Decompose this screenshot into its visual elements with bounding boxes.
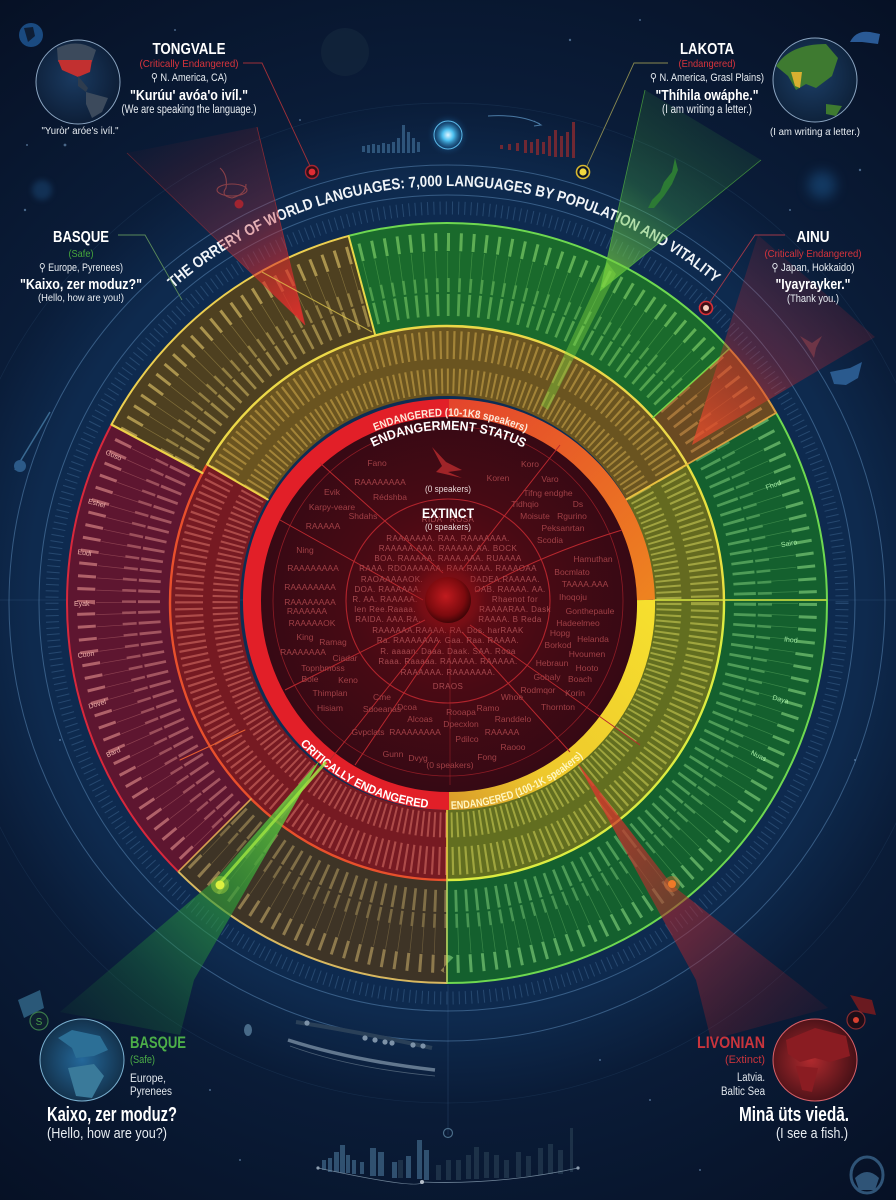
callout: livonian: Latvia. — [737, 1072, 765, 1084]
callout: livonian: (I see a fish.) — [776, 1125, 848, 1142]
callout: basque bottom: Europe, — [130, 1073, 166, 1085]
ring of language labels: RAAAAAAAA — [389, 727, 441, 737]
callout: tongvale — [122, 41, 257, 116]
beam: basque — [60, 760, 326, 1035]
ring of language labels: Fong — [477, 752, 497, 762]
extinct language rows: BOA. RAAAAA. RAAA.AAA. RUAAAA — [374, 554, 522, 563]
central star icon — [426, 113, 470, 157]
marker: ainu — [700, 302, 712, 314]
ring of language labels: Hvoumen — [569, 649, 605, 659]
globe caption: tongvale: "Yuròr' aróe's ivíl." — [42, 126, 119, 137]
callout: livonian: LIVONIAN — [697, 1033, 765, 1052]
callout: tongvale: TONGVALE — [152, 41, 226, 58]
icon: extinct bird — [432, 447, 462, 478]
inner guide circles — [273, 426, 623, 776]
icon: safe badge: S — [36, 1017, 43, 1028]
inner disk — [256, 410, 640, 794]
ring of language labels: Fano — [367, 458, 387, 468]
ring of language labels: Borkod — [545, 640, 572, 650]
callout: basque top: (Safe) — [68, 248, 94, 260]
callout: lakota: LAKOTA — [680, 41, 734, 58]
ring of language labels: Hisiam — [317, 703, 343, 713]
marker: lakota — [576, 166, 590, 178]
label: 0 speakers upper: (0 speakers) — [425, 484, 471, 495]
icon: small planet — [19, 23, 43, 47]
sector: middle ring south-west — [168, 464, 446, 882]
sector: outer ring olive south — [178, 800, 447, 984]
ring of language labels — [280, 458, 615, 770]
icon: bottom-right crest — [851, 1157, 883, 1193]
ring of language labels: (0 speakers) — [426, 760, 474, 770]
ring of language labels: RAAAAAOK — [289, 618, 336, 628]
ring of language labels: Dcoa — [397, 702, 417, 712]
ring of language labels: Moisute — [520, 511, 550, 521]
extinct language rows: RAAA. RDOAAAAAA. RAA.RAAA. RAAAOAA — [359, 564, 537, 573]
arc gauge — [288, 1020, 435, 1076]
ring of language labels: Bole — [301, 674, 319, 684]
extinct language rows — [352, 515, 552, 691]
extinct language rows: Raaa. Raaaaa. RAAAAA. RAAAAA. — [378, 657, 518, 666]
ring of language labels: Raooo — [500, 742, 526, 752]
extinct language rows: RAAAAAA. RAAAAAAA. — [401, 668, 495, 677]
moon — [321, 28, 369, 76]
callout: ainu: "Iyayrayker." — [776, 276, 850, 293]
globe: europe — [40, 1019, 124, 1101]
extinct language rows: Ra. RAAAAAAA. Gaa. Raa. RAAAA. — [377, 636, 519, 645]
callout: ainu: ⚲ Japan, Hokkaido) — [772, 262, 854, 274]
ring of language labels: Boach — [568, 674, 592, 684]
callout: tongvale: (Critically Endangered) — [140, 58, 238, 70]
ring of language labels: Keno — [338, 675, 358, 685]
ring of language labels: Randdelo — [495, 714, 531, 724]
ring of language labels: Alcoas — [407, 714, 433, 724]
sector: middle ring south-east — [448, 603, 726, 882]
callout: basque top: "Kaixo, zer moduz?" — [20, 276, 142, 293]
planet glow: left — [32, 180, 52, 200]
callout: tongvale: (We are speaking the language.) — [122, 104, 257, 116]
extinct language rows: DRAOS — [433, 682, 463, 691]
extinct language rows: DOA. RAAAAAA. — [354, 585, 422, 594]
ring of language labels: Sdoeanas — [363, 704, 401, 714]
marker: tongvale — [306, 166, 318, 178]
band label: endangered: ENDANGERED (10-1K8 speakers) — [372, 408, 528, 434]
ring of language labels: Varo — [541, 474, 559, 484]
callout: ainu: (Thank you.) — [787, 293, 839, 305]
radial language names: west: Dovel — [88, 699, 107, 711]
ring of language labels: Gunn — [383, 749, 404, 759]
ring of language labels: Hebraun — [536, 658, 569, 668]
icon: left sword — [15, 412, 50, 470]
ring of language labels: Peksanrtan — [542, 523, 585, 533]
sector: middle ring east — [626, 464, 726, 603]
ring of language labels: Ds — [573, 499, 583, 509]
icon: right blue map — [830, 362, 862, 385]
ring of language labels: Ramo — [477, 703, 500, 713]
radial language names: west: Eudi — [77, 549, 92, 558]
ring of language labels: Hamuthan — [573, 554, 613, 564]
ring of language labels: Topnbmoss — [301, 663, 345, 673]
mini chart: blue waveform — [362, 125, 420, 153]
callout: basque bottom: (Safe) — [130, 1054, 155, 1066]
ring of language labels: Karpy-veare — [309, 502, 355, 512]
globe caption: lakota: (I am writing a letter.) — [770, 126, 860, 138]
ring of language labels: Cme — [373, 692, 391, 702]
icon: extinct badge — [847, 995, 876, 1029]
status band — [252, 408, 646, 801]
ring of language labels: Dvyg — [408, 753, 428, 763]
ring of language labels: RAAAAAAA — [280, 647, 326, 657]
callout: livonian: (Extinct) — [725, 1054, 765, 1066]
radial language names: east: Ihod — [784, 636, 798, 645]
sector: outer ring critical west — [66, 424, 250, 872]
arrow: top centre — [488, 116, 541, 126]
ring of language labels: Koro — [521, 459, 539, 469]
callout: livonian: Baltic Sea — [721, 1086, 766, 1098]
ring of language labels: Gobaly — [534, 672, 561, 682]
marker: livonian ring — [664, 876, 680, 892]
callout: tongvale: ⚲ N. America, CA) — [151, 72, 227, 84]
label: extinct: EXTINCT — [422, 505, 474, 521]
ring of language labels: RAAAAA — [485, 727, 520, 737]
extinct language rows: RAAAA. B Reda — [478, 615, 542, 624]
leader lines — [118, 63, 785, 302]
callout: basque bottom: BASQUE — [130, 1033, 186, 1052]
ring of language labels: Ning — [296, 545, 314, 555]
callout: basque top — [20, 229, 142, 304]
globe: north america — [36, 40, 120, 124]
sector: middle ring north — [206, 324, 688, 499]
ring of language labels: Tifng endghe — [523, 488, 573, 498]
radial language names: east: Sairo — [781, 539, 798, 549]
planet glow: right — [808, 171, 836, 199]
beam: lakota — [541, 90, 761, 410]
ring of language labels: Hopg — [550, 628, 570, 638]
ring of language labels: Gvpclats — [351, 727, 385, 737]
icon: pin — [444, 1128, 452, 1138]
ring of language labels: Ciadar — [332, 653, 358, 663]
callout: lakota: (I am writing a letter.) — [662, 104, 752, 116]
radial language names: east: Daya — [771, 695, 789, 706]
radial language names: west: Cuon — [77, 651, 95, 660]
ring of language labels: Helanda — [577, 634, 609, 644]
extinct language rows: RAAAAAA.RAAAA. RA. Dos. harRAAK — [372, 626, 524, 635]
ring of language labels: Rodmqor — [521, 685, 556, 695]
extinct language rows: OAB. RAAAA. AA. — [474, 585, 546, 594]
radial language names: west — [74, 449, 122, 759]
extinct language rows: RIDA ROSA — [422, 515, 474, 524]
callout: lakota — [650, 41, 764, 116]
callout: basque bottom: Kaixo, zer moduz? — [47, 1104, 177, 1126]
ring of language labels: Gonthepaule — [566, 606, 615, 616]
band label: critically endangered: CRITICALLY ENDANGERED — [302, 740, 428, 808]
ring of language labels: RAAAAAAAA — [354, 477, 406, 487]
band label: endangered lower: ENDANGERED (100-1K speakers) — [451, 752, 584, 809]
radial language names: west: Eyak — [74, 601, 90, 608]
icon: flower — [234, 200, 244, 208]
ring of language labels: RAAAAAA — [287, 606, 327, 616]
callout: lakota: ⚲ N. America, Grasl Plains) — [650, 72, 764, 84]
globe: eurasia red — [773, 1019, 857, 1101]
icon: small scroll — [244, 1024, 252, 1036]
ring of language labels: Scodia — [537, 535, 563, 545]
ring of language labels: Pdilco — [455, 734, 479, 744]
sector: outer ring safe north — [348, 222, 730, 416]
radial language names: east: Fhod — [765, 480, 782, 492]
ring of language labels: Rooapa — [446, 707, 476, 717]
ring of language labels: Korin — [565, 688, 585, 698]
callout: lakota: "Thíhila owáphe." — [656, 87, 758, 104]
title: THE ORRERY OF WORLD LANGUAGES: 7,000 LANGUAGES BY POPULATION AND VITALITY — [166, 175, 722, 286]
extinct language rows: RAAAAA.AAA. RAAAAA.AA. BOCK — [379, 544, 517, 553]
extinct language rows: Rhaenot for — [492, 595, 538, 604]
heading: endangerment status: ENDANGERMENT STATUS — [370, 420, 526, 447]
callout: ainu: AINU — [796, 229, 830, 246]
ring of language labels: Ihoqoju — [559, 592, 587, 602]
extinct language rows: RAIDA. AAA.RA. — [355, 615, 421, 624]
sector: outer ring safe east — [447, 412, 828, 984]
icon: top-left animal — [217, 168, 247, 198]
callout: basque bottom: Pyrenees — [130, 1086, 172, 1098]
callout: lakota: (Endangered) — [678, 58, 736, 70]
callout: basque top: BASQUE — [53, 229, 109, 246]
beam: livonian — [577, 762, 828, 1040]
radial language names: east — [749, 480, 798, 763]
central ball — [416, 568, 480, 632]
icon: safe badge — [18, 990, 48, 1030]
ring of language labels: Whoe — [501, 692, 523, 702]
ring of language labels: Thornton — [541, 702, 575, 712]
beam: tongvale — [127, 127, 372, 332]
extinct language rows: RAAAAAAA. RAA. RAAAAAAA. — [386, 534, 510, 543]
icon: top-right animal — [850, 32, 880, 44]
beam: ainu — [692, 235, 875, 445]
callout: basque top: ⚲ Europe, Pyrenees) — [39, 262, 123, 274]
extinct language rows: RAAAARAA. Dask — [479, 605, 552, 614]
extinct language rows: R. aaaan. Daaa. Daak. SAA. Rooa — [380, 647, 516, 656]
bottom bar chart — [316, 1128, 580, 1184]
callout: ainu: (Critically Endangered) — [764, 248, 862, 260]
radial language names: west: Eshel — [87, 498, 106, 510]
extinct language rows: Ien Ree.Raaaa. — [354, 605, 416, 614]
globe: asia — [773, 38, 857, 122]
sector dividers — [112, 236, 826, 983]
ring of language labels: Ramag — [319, 637, 347, 647]
ring of language labels: RAAAAAAAA — [287, 563, 339, 573]
spokes — [280, 445, 640, 785]
ring of language labels: Rgurino — [557, 511, 587, 521]
radial language names: west: Guso — [104, 449, 122, 463]
ring of language labels: Bocmlato — [554, 567, 590, 577]
ring of language labels: Hooto — [576, 663, 599, 673]
extinct language rows: DADEA.RAAAAA. — [470, 575, 540, 584]
ring of language labels: Hadeelmeo — [556, 618, 600, 628]
ring of language labels: Rédshba — [373, 492, 407, 502]
ring of language labels: RAAAAA — [306, 521, 341, 531]
ring of language labels: RAAAAAAAA — [284, 582, 336, 592]
label: 0 speakers lower: (0 speakers) — [425, 522, 471, 532]
extinct language rows: R. AA. RAAAAA. — [352, 595, 418, 604]
callout: basque bottom: (Hello, how are you?) — [47, 1125, 167, 1142]
icon: japan map — [648, 158, 678, 208]
callout: basque bottom — [47, 1033, 186, 1142]
ring of language labels: Koren — [487, 473, 510, 483]
sector: outer ring olive north-west — [110, 235, 374, 472]
ring of language labels: Tidhqio — [511, 499, 539, 509]
radial language names: west: Bard — [105, 747, 122, 759]
ring of language labels: RAAAAAAAA — [284, 597, 336, 607]
ring of language labels: TAAAA.AAA — [562, 579, 609, 589]
ring of language labels: King — [296, 632, 314, 642]
ring of language labels: Thimplan — [313, 688, 348, 698]
marker: basque ring — [211, 876, 229, 894]
ring of language labels: Shdahs — [349, 511, 377, 521]
ring of language labels: Dpecxlon — [443, 719, 479, 729]
radial language names: east: Nuas — [749, 750, 768, 763]
callout: livonian: Minā üts viedā. — [739, 1104, 849, 1126]
callout: livonian — [697, 1033, 849, 1142]
ring of language labels: Evik — [324, 487, 341, 497]
callout: ainu — [764, 229, 862, 305]
icon: ainu star — [800, 336, 822, 358]
icon: left blue blob — [14, 460, 26, 472]
callout: tongvale: "Kurúu' avóa'o ivíl." — [130, 87, 248, 104]
extinct language rows: RAOAAAAAOK. — [361, 575, 423, 584]
mini chart: red waveform — [500, 122, 575, 158]
callout: basque top: (Hello, how are you!) — [38, 292, 124, 304]
sector: outer ring vulnerable wedge — [654, 348, 777, 463]
